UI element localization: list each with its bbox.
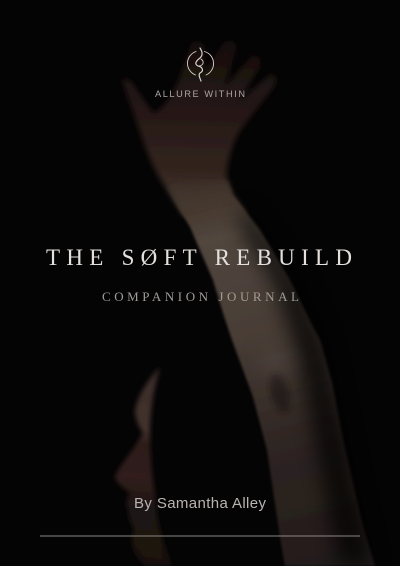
subtitle: COMPANION JOURNAL — [102, 289, 299, 304]
title: THE SØFT REBUILD — [46, 245, 352, 270]
author: By Samantha Alley — [134, 495, 266, 512]
photo: woman's face in profile — [115, 367, 172, 566]
divider line — [40, 536, 360, 537]
photo: raised arm — [166, 180, 375, 566]
photo: blurred hand — [122, 41, 276, 215]
brand name: ALLURE WITHIN — [155, 89, 245, 99]
logo: snake in circle — [188, 48, 214, 81]
